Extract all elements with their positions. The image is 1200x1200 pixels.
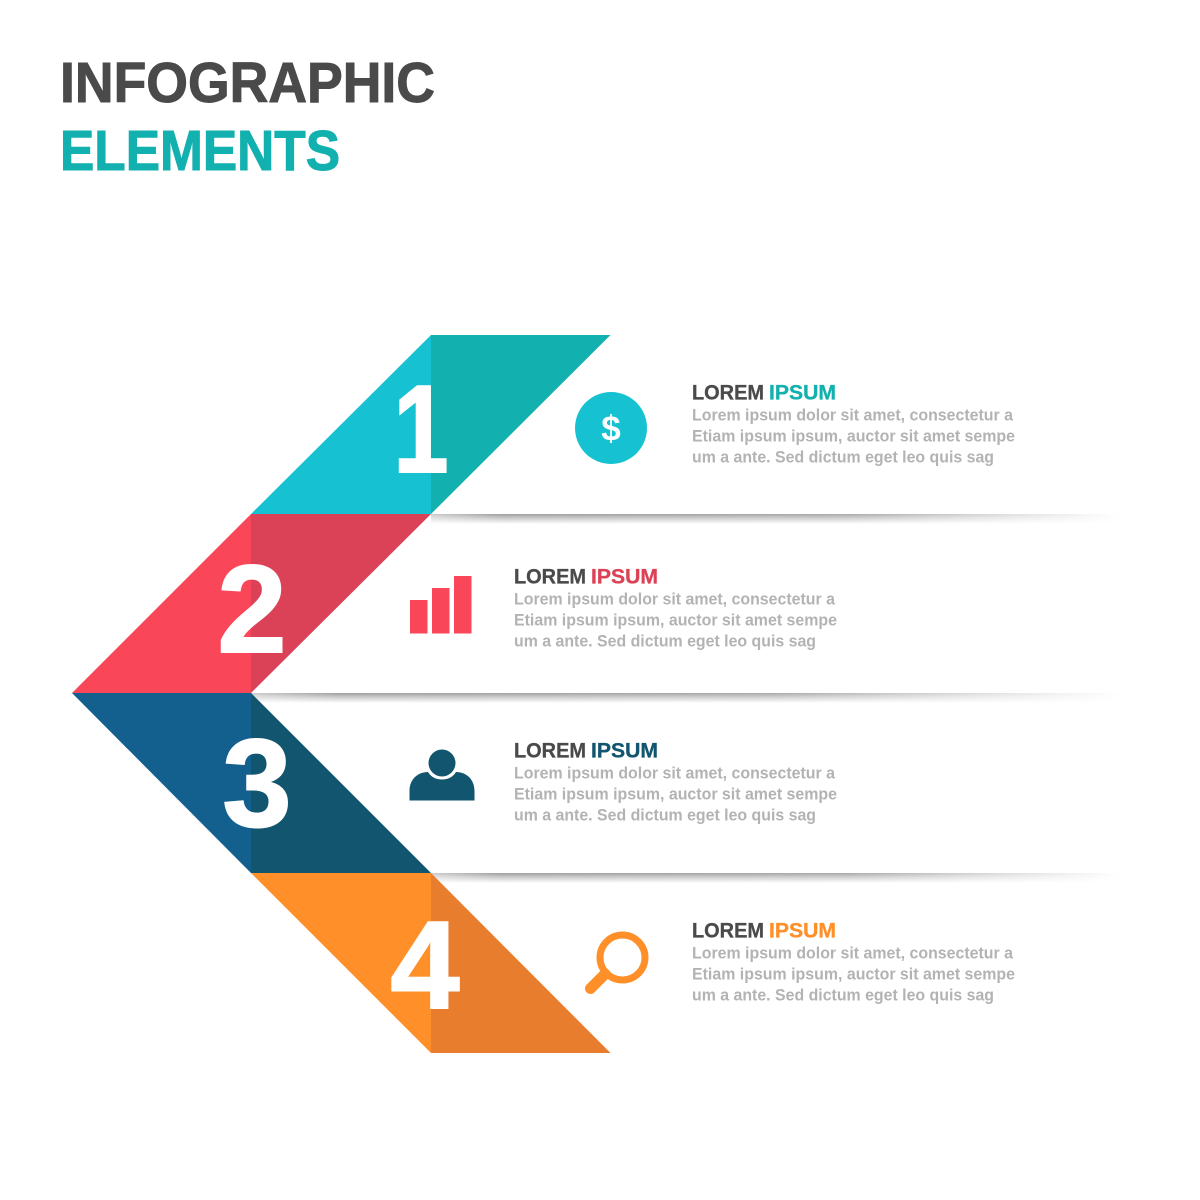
icon: magnifying glass bbox=[590, 935, 645, 988]
text block 3: IPSUM bbox=[591, 738, 658, 762]
text block 2: LOREM bbox=[514, 564, 586, 588]
title: ELEMENTS bbox=[60, 119, 340, 183]
icon: dollar coin: $ bbox=[601, 410, 621, 448]
number 2: 2 bbox=[218, 541, 286, 679]
text block 1: Etiam ipsum ipsum, auctor sit amet sempe bbox=[692, 426, 1015, 446]
text block 2: um a ante. Sed dictum eget leo quis sag bbox=[514, 632, 816, 650]
text block 3: Etiam ipsum ipsum, auctor sit amet sempe bbox=[514, 784, 837, 804]
text block 1 bbox=[692, 380, 1015, 466]
title bbox=[60, 51, 435, 183]
text block 4: IPSUM bbox=[769, 918, 836, 942]
text block 3: Lorem ipsum dolor sit amet, consectetur a bbox=[514, 764, 836, 782]
text block 2 bbox=[514, 564, 837, 650]
text block 1: Lorem ipsum dolor sit amet, consectetur a bbox=[692, 406, 1014, 424]
text block 1: IPSUM bbox=[769, 380, 836, 404]
chevron segment 2 bbox=[72, 514, 431, 693]
title: INFOGRAPHIC bbox=[60, 51, 435, 115]
number 4: 4 bbox=[391, 897, 460, 1035]
text block 1: LOREM bbox=[692, 380, 764, 404]
chevron segment 1 bbox=[251, 335, 610, 514]
icon: dollar coin bbox=[575, 392, 647, 464]
text block 4: um a ante. Sed dictum eget leo quis sag bbox=[692, 986, 994, 1004]
text block 1: um a ante. Sed dictum eget leo quis sag bbox=[692, 448, 994, 466]
text block 3: um a ante. Sed dictum eget leo quis sag bbox=[514, 806, 816, 824]
text block 4: LOREM bbox=[692, 918, 764, 942]
chevron segment 4 bbox=[251, 873, 610, 1053]
text block 3: LOREM bbox=[514, 738, 586, 762]
text block 2: Lorem ipsum dolor sit amet, consectetur a bbox=[514, 590, 836, 608]
number 3: 3 bbox=[223, 715, 291, 853]
text block 4: Etiam ipsum ipsum, auctor sit amet sempe bbox=[692, 964, 1015, 984]
text block 4 bbox=[692, 918, 1015, 1004]
icon: bar chart bbox=[410, 576, 472, 634]
text block 3 bbox=[514, 738, 837, 824]
text block 2: Etiam ipsum ipsum, auctor sit amet sempe bbox=[514, 610, 837, 630]
text block 4: Lorem ipsum dolor sit amet, consectetur a bbox=[692, 944, 1014, 962]
number 1: 1 bbox=[393, 359, 449, 499]
text block 2: IPSUM bbox=[591, 564, 658, 588]
icon: person bbox=[410, 750, 474, 800]
chevron segment 3 bbox=[72, 693, 431, 873]
